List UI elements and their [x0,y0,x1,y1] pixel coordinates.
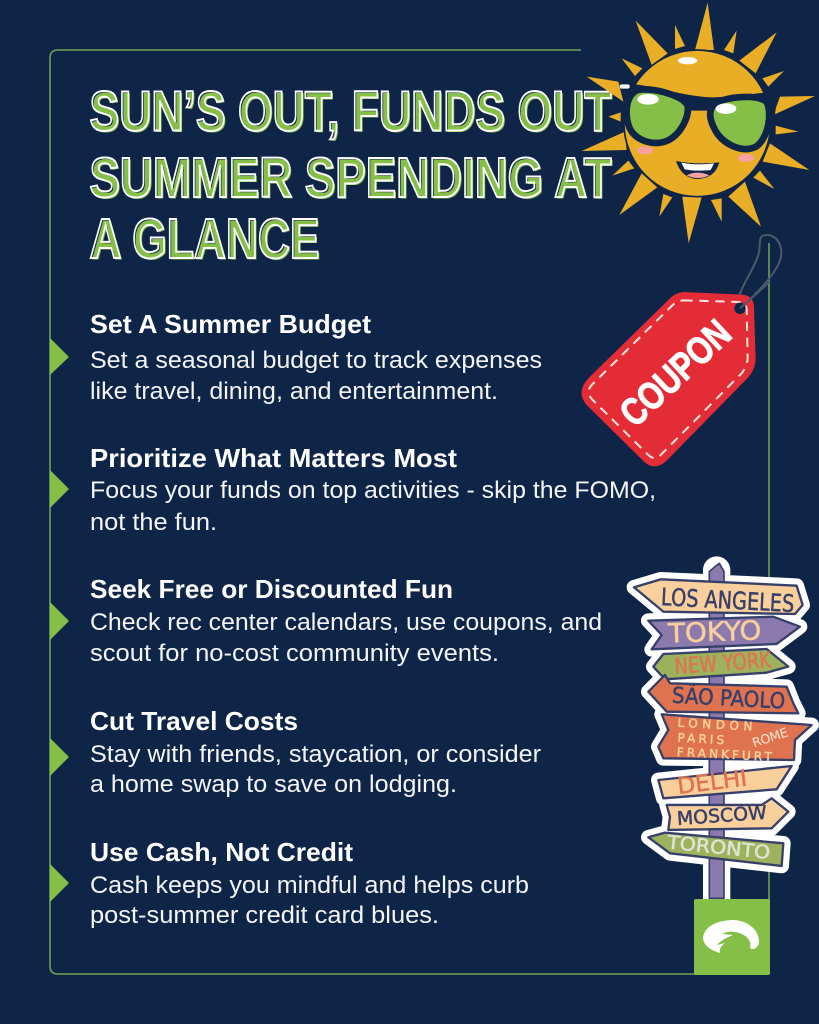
list item 3 [50,574,602,667]
icon: signpost: LONDON [677,716,753,734]
list item 5: Use Cash, Not Credit [90,837,353,867]
icon: signpost: NEW YORK [674,648,772,680]
list item 1: Set A Summer Budget [90,309,371,339]
title: SUN’S OUT, FUNDS OUT [91,81,613,145]
list item 4: a home swap to save on lodging. [90,771,457,798]
list item 2: not the fun. [90,509,217,536]
title: SUMMER SPENDING AT [91,148,613,212]
list item 3: Check rec center calendars, use coupons, and [90,609,602,636]
list item 5: post-summer credit card blues. [90,902,439,929]
title: SUMMER SPENDING AT [90,146,612,210]
icon: signpost: ROME [750,725,790,750]
list item 4: Stay with friends, staycation, or consider [90,741,541,768]
icon: coupon tag: COUPON [612,312,740,435]
icon: signpost: MOSCOW [676,803,767,830]
list item 1: like travel, dining, and entertainment. [90,378,498,405]
list item 1 [50,309,542,405]
list item 2 [50,443,656,536]
list item 5 [50,837,529,929]
list item 4 [50,706,541,798]
title: A GLANCE [91,208,321,272]
icon: signpost: DELHI [676,766,749,800]
list item 4: Cut Travel Costs [90,706,298,736]
title [90,80,613,272]
icon: signpost: TORONTO [665,832,771,864]
list item 2: Prioritize What Matters Most [90,443,457,473]
list item 1: Set a seasonal budget to track expenses [90,347,542,374]
icon: sun with sunglasses [582,3,815,243]
list item 5: Cash keeps you mindful and helps curb [90,872,529,899]
icon: coupon tag [582,235,781,466]
icon: signpost: FRANKFURT [677,745,773,764]
logo badge [694,899,770,975]
icon: signpost: TOKYO [666,615,762,650]
list item 2: Focus your funds on top activities - skip the FOMO, [90,477,656,504]
list item 3: scout for no-cost community events. [90,640,499,667]
title: A GLANCE [90,207,320,271]
icon: signpost: PARIS [677,731,725,747]
icon: signpost [634,563,812,900]
icon: signpost: SÃO PAOLO [671,682,786,715]
list item 3: Seek Free or Discounted Fun [90,574,453,604]
title: SUN’S OUT, FUNDS OUT [90,80,612,144]
